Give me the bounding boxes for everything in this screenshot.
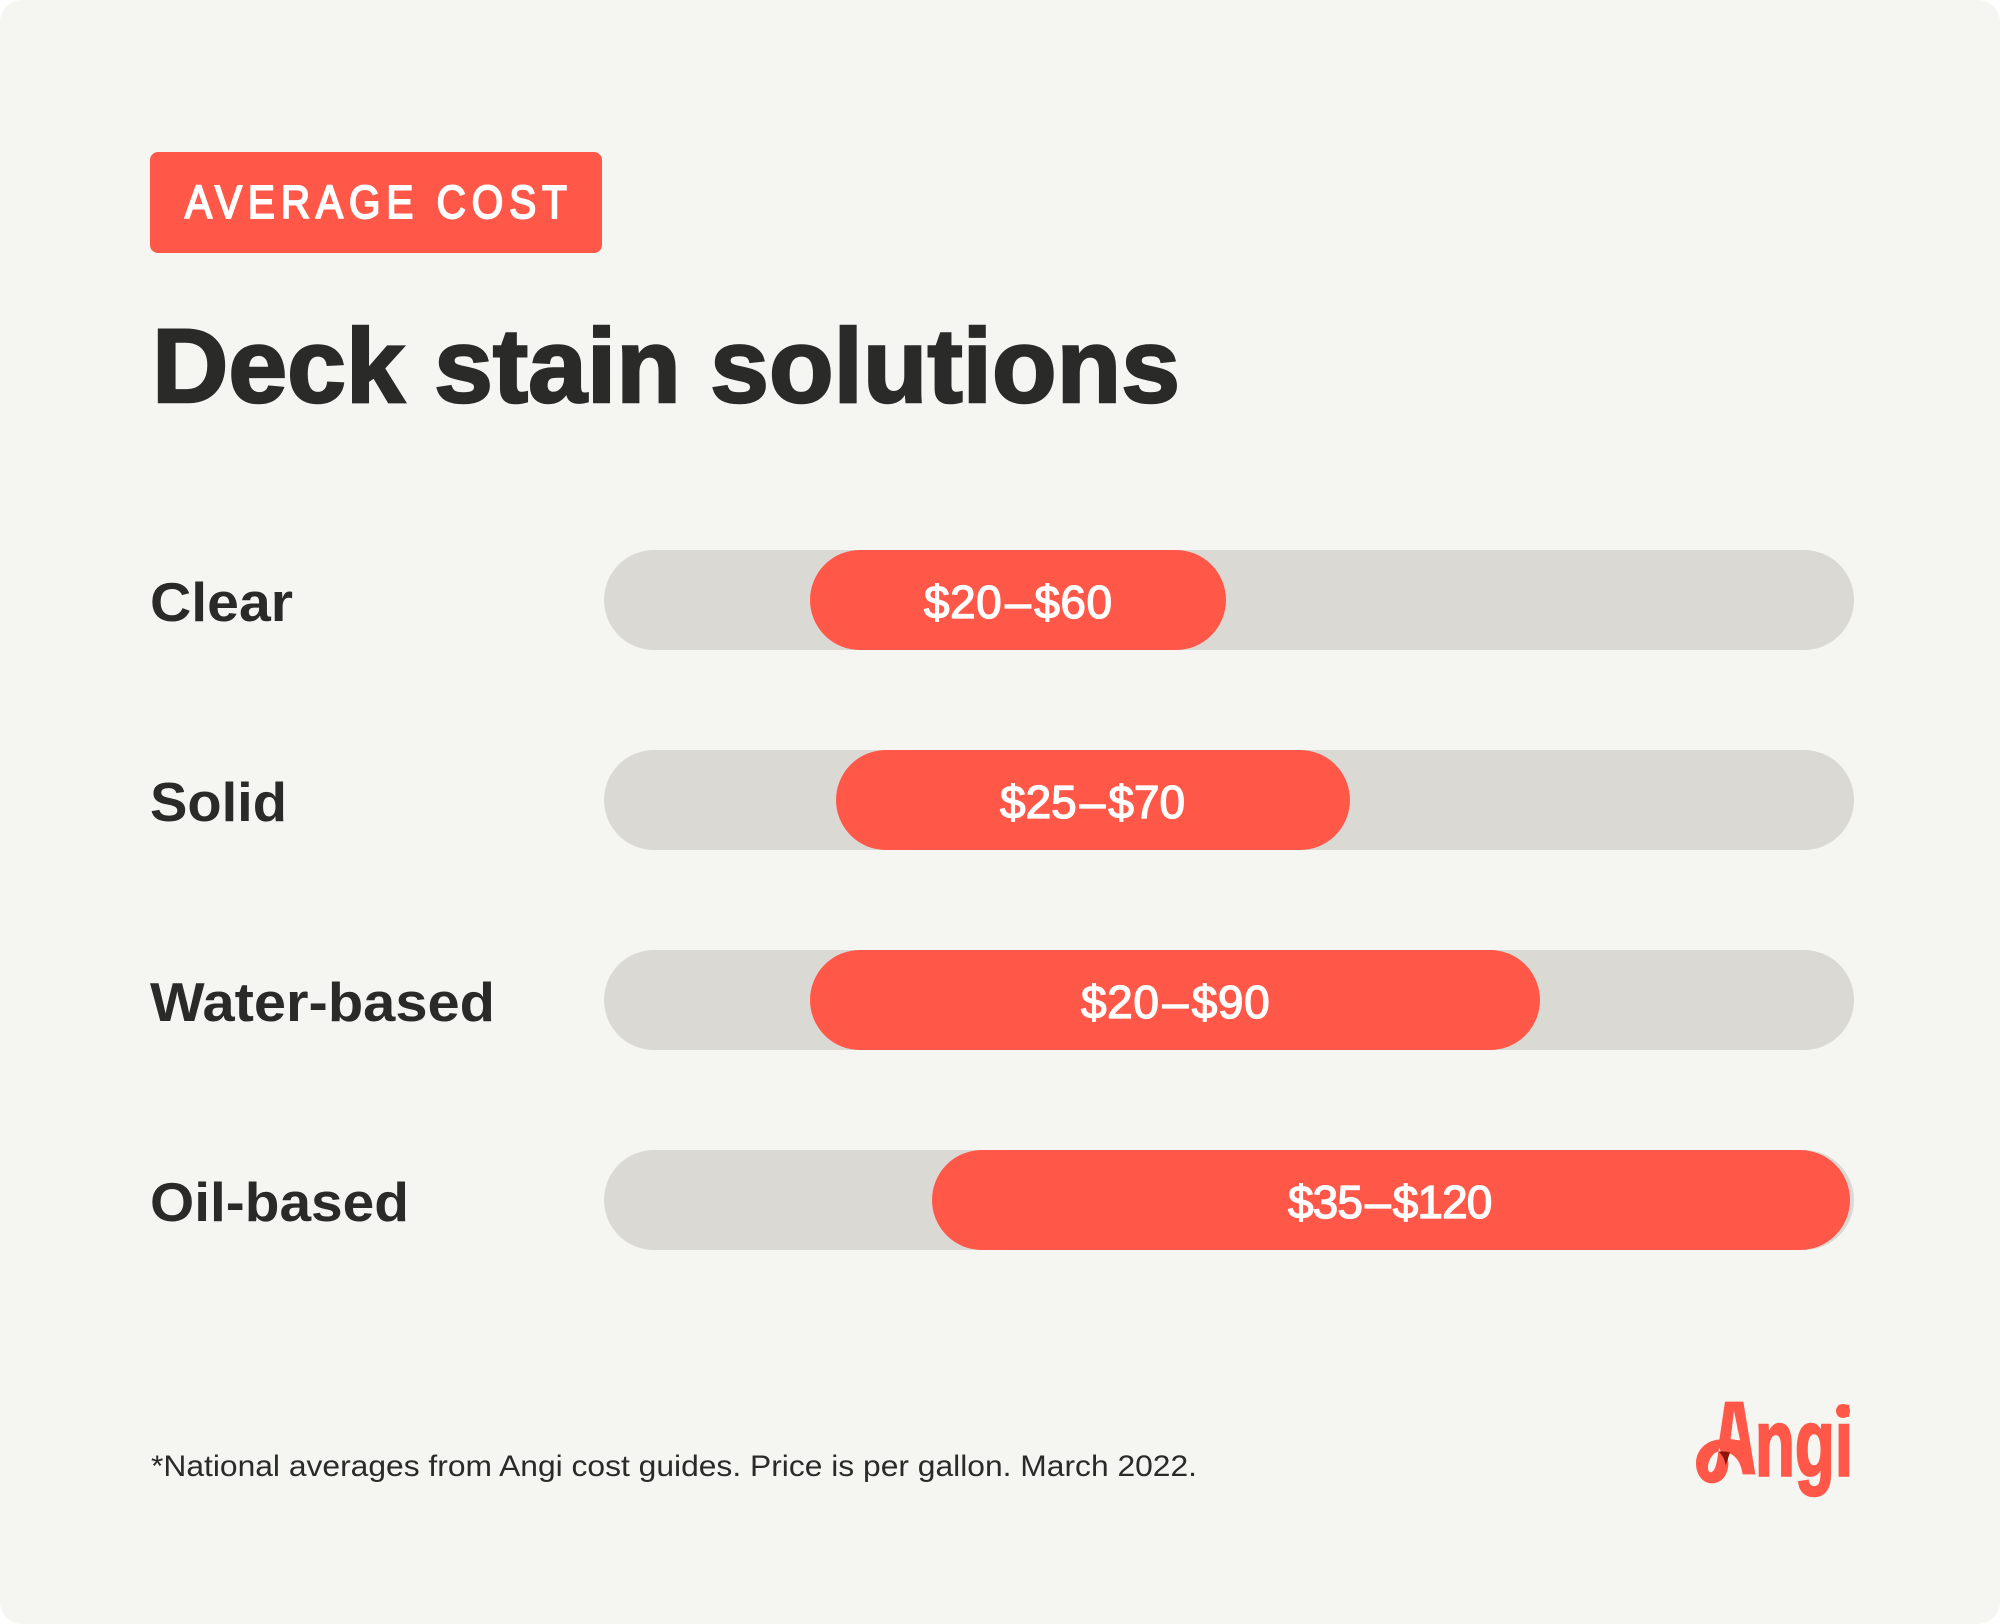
logo: Angi: A (1722, 1395, 1746, 1451)
logo: Angi (1696, 1389, 1853, 1496)
value: water-based: $20–$90 (1081, 976, 1270, 1028)
track: water-based (604, 950, 1854, 1050)
track: solid (604, 750, 1854, 850)
range bar: water-based (810, 950, 1540, 1050)
row: solid (150, 750, 1854, 850)
range bar: solid (836, 750, 1350, 850)
value: solid: $25–$70 (1000, 776, 1185, 828)
label: clear: Clear (150, 571, 293, 633)
value: clear: $20–$60 (924, 576, 1113, 628)
value: oil-based: $35–$120 (1288, 1176, 1491, 1228)
track: clear (604, 550, 1854, 650)
label: water-based: Water-based (150, 971, 495, 1033)
range bar: oil-based (932, 1150, 1850, 1250)
range bar: clear (810, 550, 1226, 650)
label: solid: Solid (150, 771, 287, 833)
logo: Angi: ngi (1755, 1389, 1853, 1496)
label: oil-based: Oil-based (150, 1171, 409, 1233)
row: water-based (150, 950, 1854, 1050)
footnote: *National averages from Angi cost guides. Price is per gallon. March 2022. (151, 1450, 1197, 1483)
bar chart: price ranges per gallon (150, 550, 1854, 1250)
row: oil-based (150, 1150, 1854, 1250)
track: oil-based (604, 1150, 1854, 1250)
badge: average cost (150, 152, 602, 253)
title: Deck stain solutions (152, 308, 1180, 425)
row: clear (150, 550, 1854, 650)
badge: average cost: AVERAGE COST (185, 178, 567, 229)
